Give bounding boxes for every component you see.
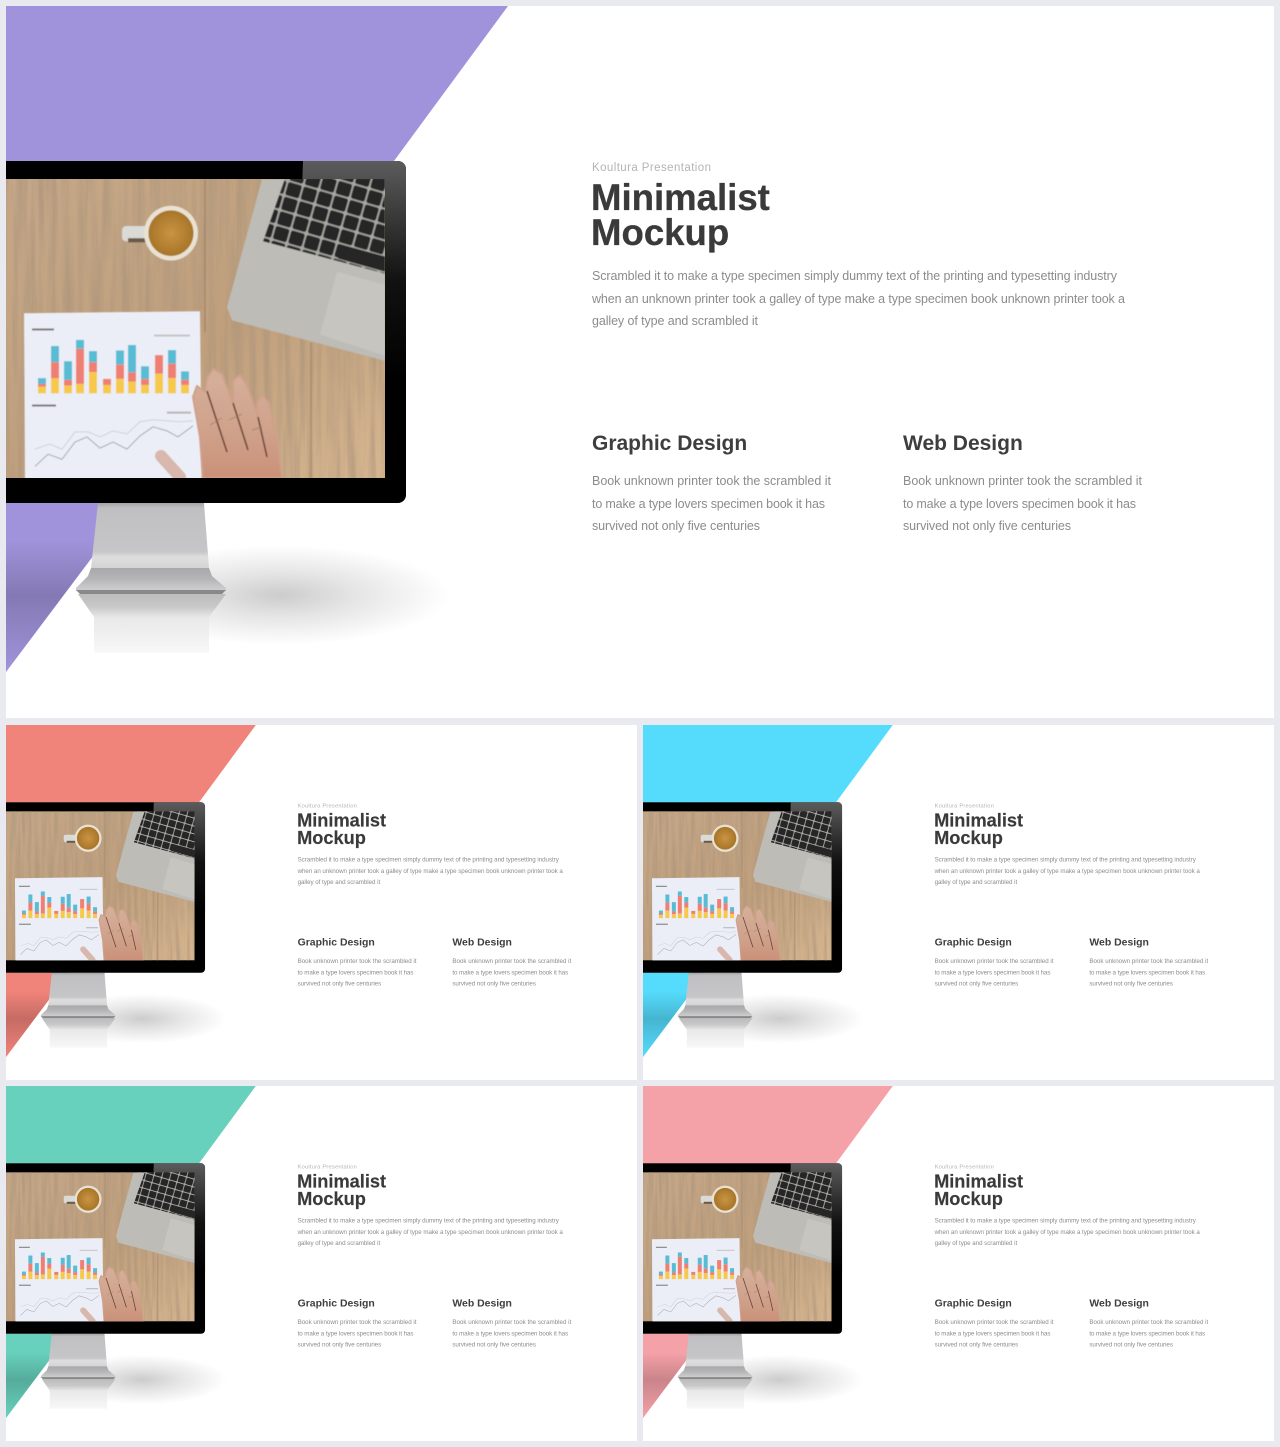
text: web design: survived not only five centuries [903, 519, 1071, 533]
text: web design [452, 958, 572, 987]
title [591, 177, 770, 253]
green top banner shape [6, 1086, 256, 1163]
text: web design: Book unknown printer took the scrambled it [452, 958, 572, 965]
text: web design: to make a type lovers specimen book it has [452, 969, 568, 976]
text: graphic design: Book unknown printer took the scrambled it [935, 958, 1054, 965]
text: graphic design: to make a type lovers specimen book it has [935, 969, 1051, 976]
intro paragraph: when an unknown printer took a galley of type make a type specimen book unknown printer took a [297, 1229, 563, 1236]
monitor mockup [643, 1163, 864, 1418]
monitor mockup with desk photo [6, 161, 450, 672]
title: Minimalist [591, 177, 770, 218]
title [297, 1171, 386, 1209]
intro paragraph [297, 857, 563, 886]
text: web design: survived not only five centuries [1089, 980, 1173, 987]
eyebrow label: Koultura Presentation [592, 162, 711, 174]
title: Minimalist [297, 810, 386, 831]
panel: cyan slide [643, 725, 1274, 1080]
text: web design: to make a type lovers specimen book it has [452, 1330, 568, 1337]
pink top banner shape [643, 1086, 893, 1163]
title: Mockup [591, 212, 729, 253]
eyebrow label: Koultura Presentation [935, 803, 994, 809]
text: web design [1089, 1319, 1209, 1348]
heading: graphic design: Graphic Design [298, 937, 375, 948]
text: graphic design: survived not only five centuries [935, 1341, 1018, 1348]
intro paragraph [591, 269, 1125, 328]
eyebrow label: Koultura Presentation [298, 1164, 357, 1170]
intro paragraph: when an unknown printer took a galley of type make a type specimen book unknown printer took a [934, 868, 1200, 875]
text: graphic design [592, 474, 832, 533]
panel: coral slide [6, 725, 637, 1080]
intro paragraph: Scrambled it to make a type specimen simply dummy text of the printing and typesetting industry [298, 857, 560, 864]
coral lower triangle [6, 973, 69, 1057]
intro paragraph [934, 1218, 1200, 1247]
text: graphic design: to make a type lovers specimen book it has [298, 969, 414, 976]
monitor mockup [6, 802, 227, 1057]
cyan lower triangle [643, 973, 706, 1057]
text: graphic design: Book unknown printer took the scrambled it [298, 1319, 417, 1326]
intro paragraph: galley of type and scrambled it [298, 1240, 380, 1247]
heading: graphic design: Graphic Design [298, 1298, 375, 1309]
title: Mockup [297, 1188, 366, 1209]
monitor mockup [6, 1163, 227, 1418]
monitor mockup [643, 802, 864, 1057]
text: graphic design: to make a type lovers specimen book it has [298, 1330, 414, 1337]
title: Mockup [297, 827, 366, 848]
heading: web design: Web Design [1089, 937, 1149, 948]
eyebrow label: Koultura Presentation [935, 1164, 994, 1170]
text: web design [452, 1319, 572, 1348]
text: graphic design: Book unknown printer took the scrambled it [935, 1319, 1054, 1326]
heading: web design: Web Design [452, 937, 512, 948]
heading: graphic design: Graphic Design [935, 937, 1012, 948]
text: web design: Book unknown printer took the scrambled it [1089, 958, 1209, 965]
text: graphic design: Book unknown printer took the scrambled it [298, 958, 417, 965]
heading: graphic design: Graphic Design [935, 1298, 1012, 1309]
text: graphic design: Book unknown printer took the scrambled it [592, 474, 832, 488]
intro paragraph: galley of type and scrambled it [935, 879, 1017, 886]
heading: web design: Web Design [1089, 1298, 1149, 1309]
intro paragraph: galley of type and scrambled it [592, 314, 759, 328]
title: Mockup [934, 827, 1003, 848]
intro paragraph: Scrambled it to make a type specimen simply dummy text of the printing and typesetting industry [298, 1218, 560, 1225]
intro paragraph [297, 1218, 563, 1247]
heading: web design: Web Design [903, 432, 1023, 455]
text: graphic design: survived not only five centuries [298, 980, 381, 987]
panel: purple hero slide [6, 6, 1274, 718]
text: graphic design: survived not only five centuries [935, 980, 1018, 987]
cyan top banner shape [643, 725, 893, 802]
intro paragraph: galley of type and scrambled it [298, 879, 380, 886]
intro paragraph: when an unknown printer took a galley of type make a type specimen book unknown printer took a [297, 868, 563, 875]
intro paragraph: when an unknown printer took a galley of type make a type specimen book unknown printer took a [934, 1229, 1200, 1236]
eyebrow label: Koultura Presentation [298, 803, 357, 809]
text: graphic design [935, 1319, 1054, 1348]
text: graphic design: survived not only five centuries [298, 1341, 381, 1348]
text: web design: Book unknown printer took the scrambled it [903, 474, 1143, 488]
text: web design: survived not only five centuries [452, 980, 536, 987]
text: web design: survived not only five centuries [452, 1341, 536, 1348]
title [934, 1171, 1023, 1209]
text: web design: survived not only five centuries [1089, 1341, 1173, 1348]
title [934, 810, 1023, 848]
green lower triangle [6, 1334, 69, 1418]
title [297, 810, 386, 848]
intro paragraph: galley of type and scrambled it [935, 1240, 1017, 1247]
purple top banner shape [6, 6, 508, 161]
text: web design [903, 474, 1143, 533]
text: web design: to make a type lovers specimen book it has [903, 497, 1136, 511]
heading: graphic design: Graphic Design [592, 432, 747, 455]
intro paragraph: Scrambled it to make a type specimen simply dummy text of the printing and typesetting industry [592, 269, 1118, 283]
intro paragraph: when an unknown printer took a galley of type make a type specimen book unknown printer took a [591, 292, 1125, 306]
title: Minimalist [297, 1171, 386, 1192]
text: graphic design [298, 958, 417, 987]
coral top banner shape [6, 725, 256, 802]
text: web design: to make a type lovers specimen book it has [1089, 969, 1205, 976]
text: web design: Book unknown printer took the scrambled it [452, 1319, 572, 1326]
intro paragraph: Scrambled it to make a type specimen simply dummy text of the printing and typesetting industry [935, 1218, 1197, 1225]
text: web design [1089, 958, 1209, 987]
text: web design: Book unknown printer took the scrambled it [1089, 1319, 1209, 1326]
text: graphic design: survived not only five centuries [592, 519, 760, 533]
title: Mockup [934, 1188, 1003, 1209]
text: web design: to make a type lovers specimen book it has [1089, 1330, 1205, 1337]
text: graphic design [298, 1319, 417, 1348]
heading: web design: Web Design [452, 1298, 512, 1309]
pink lower triangle [643, 1334, 706, 1418]
intro paragraph [934, 857, 1200, 886]
title: Minimalist [934, 1171, 1023, 1192]
purple lower triangle [6, 503, 133, 672]
text: graphic design: to make a type lovers specimen book it has [592, 497, 825, 511]
title: Minimalist [934, 810, 1023, 831]
text: graphic design: to make a type lovers specimen book it has [935, 1330, 1051, 1337]
text: graphic design [935, 958, 1054, 987]
panel: pink slide [643, 1086, 1274, 1441]
intro paragraph: Scrambled it to make a type specimen simply dummy text of the printing and typesetting industry [935, 857, 1197, 864]
panel: green slide [6, 1086, 637, 1441]
